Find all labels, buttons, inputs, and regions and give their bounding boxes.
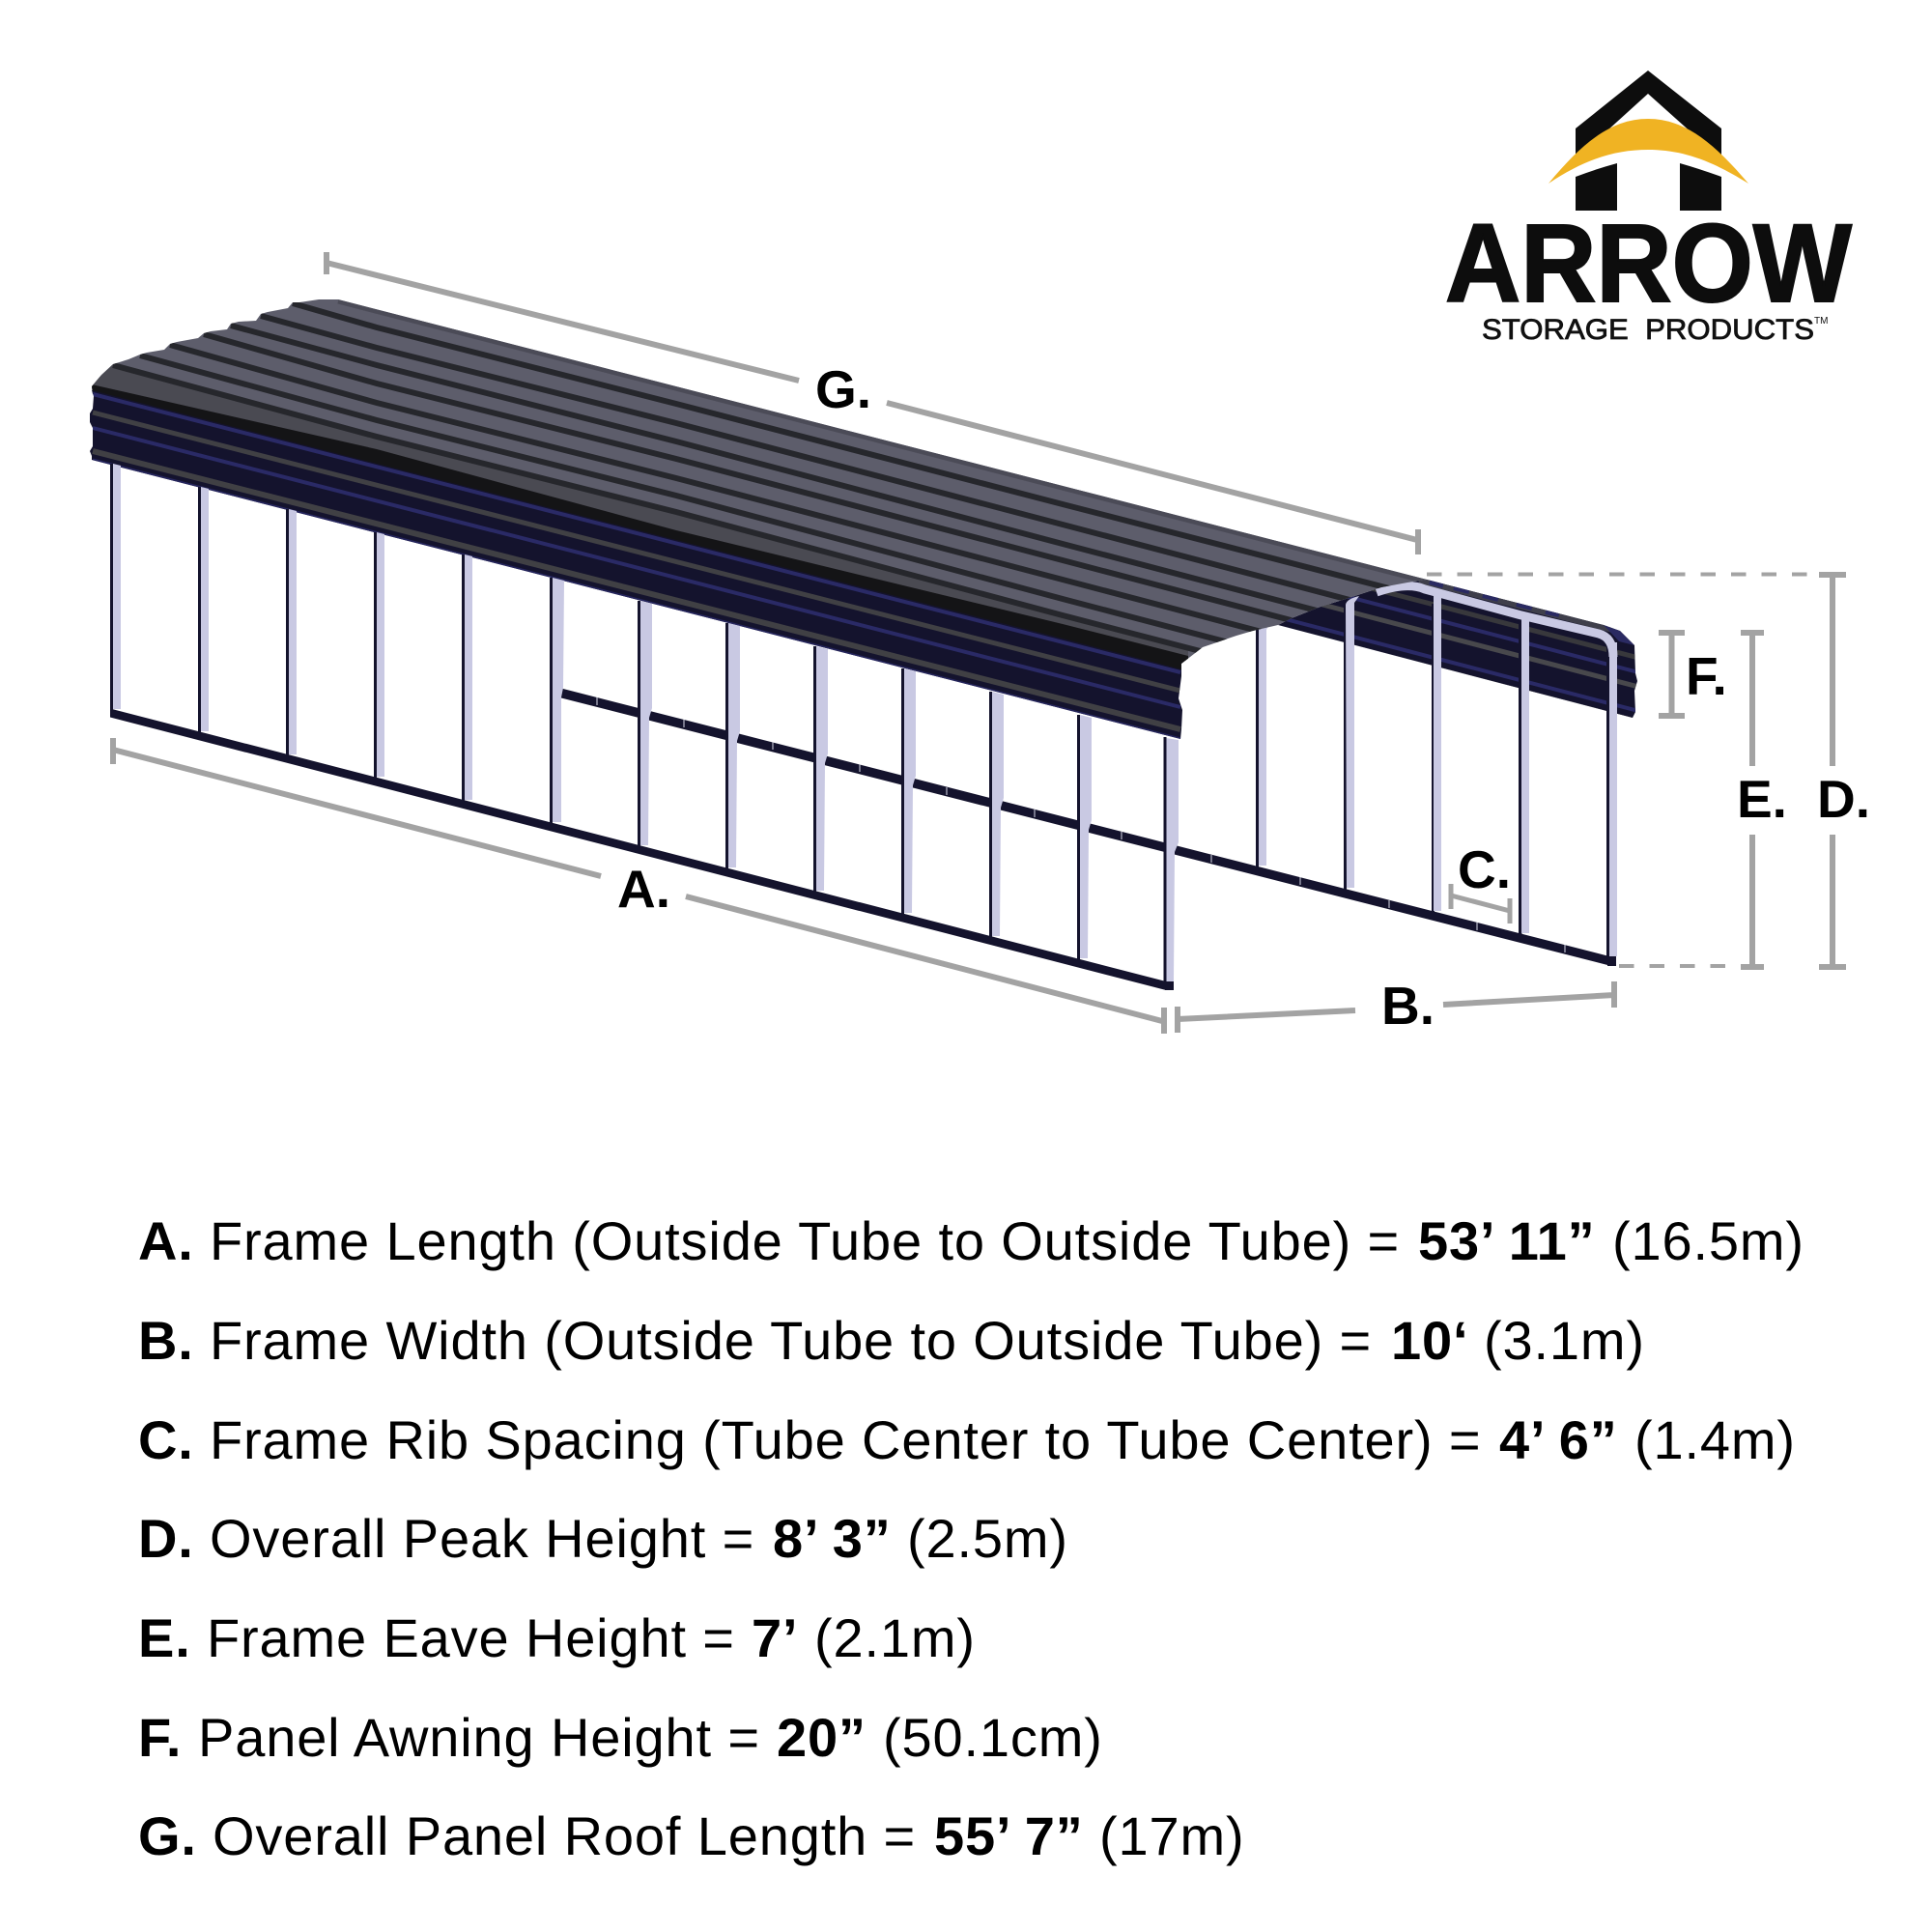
spec B: Frame Width (Outside Tube to Outside Tube) = [210,1310,1372,1371]
dimension A [113,738,1164,1034]
dimension E [1737,633,1787,967]
spec G: G. [138,1805,197,1866]
spec B: B. [138,1310,194,1371]
back posts [1256,593,1617,966]
logo gold arc [1548,119,1748,184]
front posts [110,464,1179,990]
spec G: Overall Panel Roof Length = [213,1805,916,1866]
dimension G [327,252,1418,554]
dimension D [1817,575,1870,967]
dimension C [1451,839,1511,923]
spec C: Frame Rib Spacing (Tube Center to Tube Center) = [210,1409,1481,1470]
fold shadow [92,384,1188,676]
spec C: (1.4m) [1634,1409,1796,1470]
spec E: 7’ [752,1607,798,1668]
spec C: 4’ 6” [1499,1409,1618,1470]
back rail [559,688,1611,966]
spec D: 8’ 3” [773,1508,892,1569]
front bottom rail [110,709,1166,990]
lavender end arch [1377,586,1613,657]
spec G: 55’ 7” [934,1805,1084,1866]
spec A: (16.5m) [1612,1210,1804,1271]
label F: F. [1686,646,1727,706]
spec E: Frame Eave Height = [207,1607,735,1668]
roof ribs [112,302,1391,653]
logo wordmark: ARROW [1445,202,1852,326]
spec F: (50.1cm) [883,1707,1103,1768]
roof top surface [92,299,1427,669]
label G: G. [815,359,871,419]
carport structure [82,299,1642,990]
fold strip [92,364,1188,662]
spec D: Overall Peak Height = [210,1508,754,1569]
label E: E. [1737,769,1787,829]
spec D: D. [138,1508,194,1569]
label B: B. [1381,976,1435,1036]
logo house walls [1576,163,1721,211]
spec E: (2.1m) [814,1607,976,1668]
logo trademark: TM [1814,316,1828,327]
logo house roof [1576,71,1721,159]
rear eave panel [1278,580,1637,718]
label D: D. [1817,769,1870,829]
spec A: 53’ 11” [1418,1210,1595,1271]
spec F: F. [138,1707,182,1768]
dashed height guides [1427,574,1819,966]
front eave panel [82,377,1188,744]
specification list [138,1210,1804,1866]
spec B: 10‘ [1391,1310,1468,1371]
spec D: (2.5m) [907,1508,1068,1569]
logo: Arrow Storage Products [1445,71,1852,346]
spec A: A. [138,1210,194,1271]
ridge highlight [338,301,1430,582]
label C: C. [1458,839,1511,899]
dimension B [1178,976,1614,1036]
spec F: Panel Awning Height = [198,1707,760,1768]
spec A: Frame Length (Outside Tube to Outside Tube) = [210,1210,1400,1271]
spec G: (17m) [1099,1805,1244,1866]
logo tagline: STORAGE PRODUCTS [1482,314,1814,346]
rail fasteners [597,697,1565,952]
dimension F [1659,633,1727,716]
spec E: E. [138,1607,191,1668]
spec C: C. [138,1409,194,1470]
spec F: 20” [777,1707,867,1768]
spec B: (3.1m) [1484,1310,1645,1371]
label A: A. [617,859,670,919]
